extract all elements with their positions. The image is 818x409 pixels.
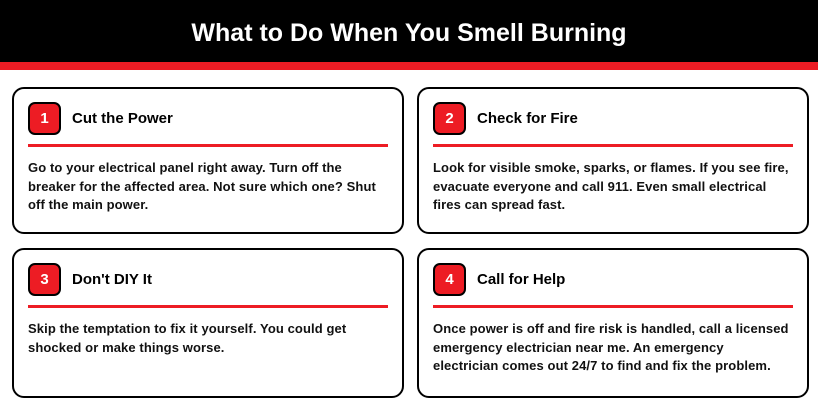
text (28, 321, 346, 354)
badge 3 (28, 263, 61, 296)
heading: Call for Help (477, 271, 565, 288)
panel: don't diy (12, 248, 404, 398)
text: electrician comes out 24/7 to find and fix the problem. (433, 358, 771, 373)
text: fires can spread fast. (433, 197, 565, 212)
text: off the main power. (28, 197, 148, 212)
text: evacuate everyone and call 911. Even small electrical (433, 178, 766, 194)
text: shocked or make things worse. (28, 340, 225, 354)
heading: Cut the Power (72, 110, 173, 127)
text (433, 321, 789, 373)
badge 1: 1 (40, 110, 49, 127)
text: Look for visible smoke, sparks, or flames. If you see fire, (433, 160, 789, 175)
badge 4 (433, 263, 466, 296)
badge 1 (28, 102, 61, 135)
panel: check for fire (417, 87, 809, 234)
heading: Check for Fire (477, 110, 578, 127)
badge 3: 3 (40, 271, 49, 288)
badge 4: 4 (445, 271, 454, 288)
text (433, 160, 789, 212)
heading: Don't DIY It (72, 271, 152, 288)
panel: call for help (417, 248, 809, 398)
badge 2: 2 (445, 110, 454, 127)
text (28, 160, 376, 212)
title (0, 0, 818, 70)
text: Once power is off and fire risk is handled, call a licensed (433, 321, 789, 336)
text: emergency electrician near me. An emergency (433, 340, 724, 354)
panel: cut the power (12, 87, 404, 234)
badge 2 (433, 102, 466, 135)
text: breaker for the affected area. Not sure which one? Shut (28, 178, 376, 194)
text: Go to your electrical panel right away. Turn off the (28, 160, 342, 175)
title: What to Do When You Smell Burning (191, 19, 627, 47)
text: Skip the temptation to fix it yourself. You could get (28, 321, 346, 336)
